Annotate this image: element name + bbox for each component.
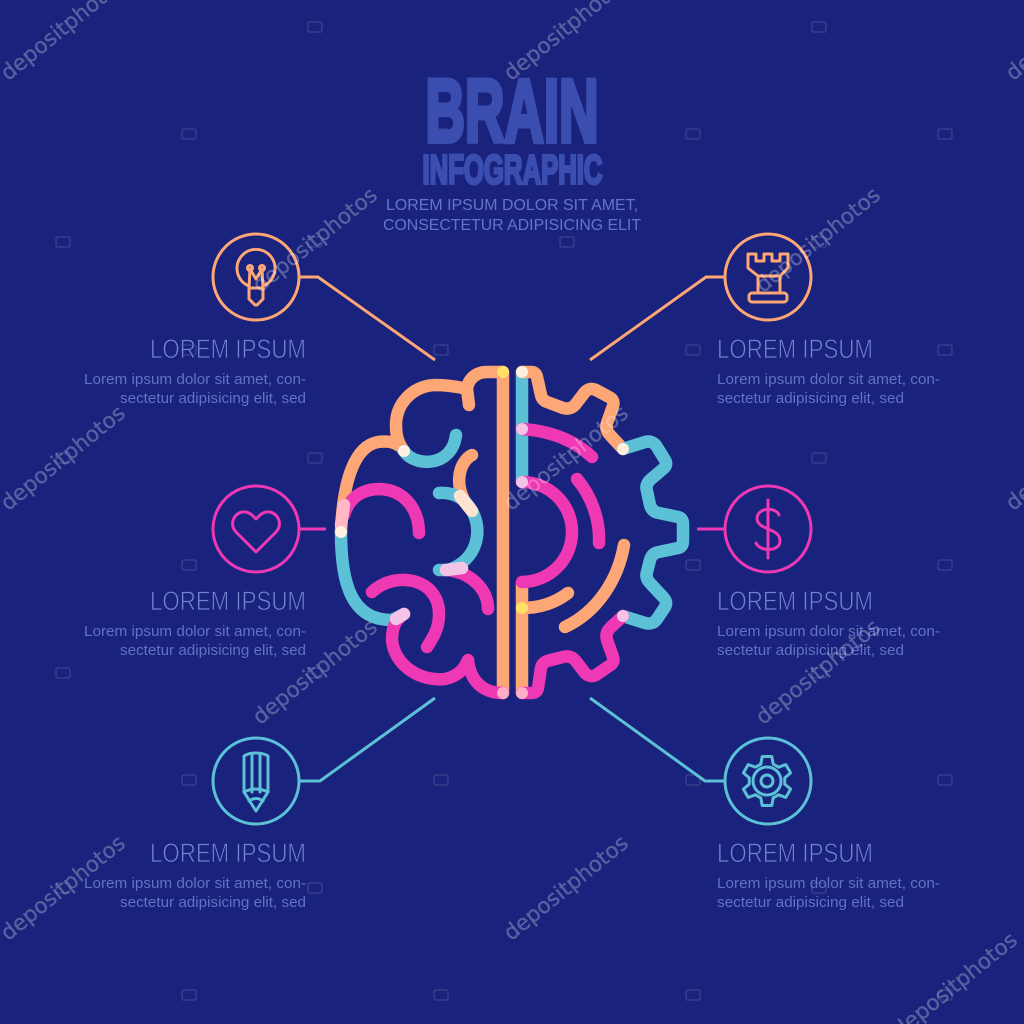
depositphotos watermarks: depositphotos [0,401,130,516]
text block: bottom right: sectetur adipisicing elit, sed [717,894,904,911]
icon: dollar [725,486,811,572]
brain half [341,372,503,693]
heading: infographic: INFOGRAPHIC [422,146,602,192]
text block: middle right: LOREM IPSUM [717,586,873,616]
depositphotos watermarks: depositphotos [499,831,633,946]
text block: middle right: Lorem ipsum dolor sit amet, con- [717,623,940,640]
text block: top left: sectetur adipisicing elit, sed [120,390,306,407]
text block: top left [84,334,306,407]
connector: top right [590,277,725,360]
subtitle: LOREM IPSUM DOLOR SIT AMET, [386,197,638,214]
connector: bottom left [300,698,435,781]
icon: gear [725,738,811,824]
text block: top right: Lorem ipsum dolor sit amet, con- [717,371,940,388]
connector: bottom right [590,698,725,781]
depositphotos watermarks: depositphotos [751,183,885,298]
text block: bottom left: sectetur adipisicing elit, sed [120,894,306,911]
text block: middle left: sectetur adipisicing elit, sed [120,642,306,659]
text block: bottom left [84,838,306,911]
text block: middle right [717,586,940,659]
text block: top right: sectetur adipisicing elit, sed [717,390,904,407]
text block: top right [717,334,940,407]
icon: heart [213,486,299,572]
text block: bottom left: Lorem ipsum dolor sit amet, con- [84,875,306,892]
text block: middle left: Lorem ipsum dolor sit amet, con- [84,623,306,640]
depositphotos watermarks: depositphotos [248,183,382,298]
icon: chess rook [725,234,811,320]
text block: bottom left: LOREM IPSUM [150,838,306,868]
connector: middle right [697,528,725,530]
text block: middle right: sectetur adipisicing elit, sed [717,642,904,659]
depositphotos watermarks: depositphotos [248,615,382,730]
text block: top left: Lorem ipsum dolor sit amet, con- [84,371,306,388]
heading: brain: BRAIN [426,60,598,160]
connector: middle left [300,528,326,530]
gear half [522,372,683,693]
connector: top left [300,277,435,360]
text block: middle left [84,586,306,659]
icon: light bulb [213,234,299,320]
depositphotos watermarks: depositphotos [0,831,130,946]
subtitle: CONSECTETUR ADIPISICING ELIT [383,217,641,234]
text block: bottom right: LOREM IPSUM [717,838,873,868]
title [383,60,641,234]
text block: bottom right [717,838,940,911]
icon: pencil [213,738,299,824]
text block: top left: LOREM IPSUM [150,334,306,364]
text block: bottom right: Lorem ipsum dolor sit amet, con- [717,875,940,892]
text block: middle left: LOREM IPSUM [150,586,306,616]
depositphotos watermarks: depositphotos [751,615,885,730]
depositphotos watermarks: depositphotos [499,401,633,516]
highlights: stroke overlaps [335,366,629,699]
text block: top right: LOREM IPSUM [717,334,873,364]
